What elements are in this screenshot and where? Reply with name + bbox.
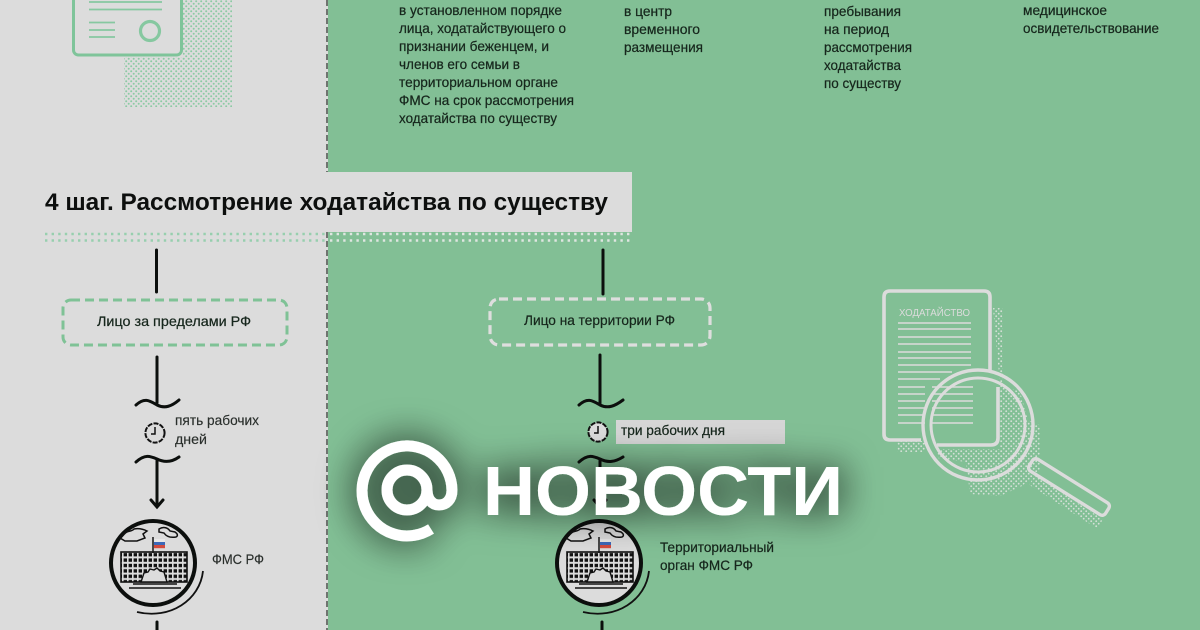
text block: placement in the territorial body: признании беженцем, и [399, 38, 549, 54]
background: green column [328, 0, 1200, 630]
text block: stay during review: пребывания [824, 3, 901, 19]
handle [1027, 457, 1111, 517]
text block: placement in the territorial body: лица, ходатайствующего о [399, 20, 566, 36]
text block: placement in the territorial body [399, 2, 574, 126]
logo wordmark: НОВОСТИ [483, 452, 843, 530]
column divider [326, 0, 328, 630]
label: five working days [175, 412, 259, 447]
arrow with break [579, 456, 623, 507]
heading dotted underline [45, 234, 632, 240]
text block: placement in the territorial body: ходатайства по существу [399, 110, 557, 126]
label: person outside Russia: Лицо за пределами РФ [97, 313, 251, 329]
connector line [155, 250, 158, 292]
text block: placement in the territorial body: членов его семьи в [399, 56, 520, 72]
label: territorial FMS body: орган ФМС РФ [660, 557, 753, 573]
icon: FMS building [111, 521, 203, 614]
text block: placement in the territorial body: в установленном порядке [399, 2, 562, 18]
lens [923, 370, 1033, 480]
logo: @ Novosti [362, 446, 843, 536]
icon: petition under magnifying glass [884, 291, 1111, 524]
icon: clock [588, 422, 608, 442]
label: five working days: дней [175, 431, 207, 447]
text block: medical examination: медицинское [1023, 2, 1107, 18]
connector line [600, 622, 604, 630]
document title: ХОДАТАЙСТВО [899, 306, 970, 319]
icon: certificate [74, 0, 232, 107]
flow: person on Russian territory [490, 250, 785, 630]
label: person on Russian territory: Лицо на территории РФ [524, 312, 675, 328]
dashed box: person outside Russia [63, 300, 287, 345]
connector line [602, 250, 604, 294]
text block: stay during review: на период [824, 21, 889, 37]
enlarged document corner [937, 387, 998, 445]
highlighted label: three working days: три рабочих дня [621, 422, 725, 438]
icon: territorial FMS building [557, 521, 649, 614]
dashed box: person on Russian territory [490, 299, 710, 345]
text block: stay during review: ходатайства [824, 57, 901, 73]
icon: clock [145, 423, 165, 443]
highlighted label: three working days [616, 420, 785, 444]
text block: medical examination: освидетельствование [1023, 20, 1159, 36]
dotted shadow [897, 308, 1040, 496]
connector with break [579, 355, 623, 407]
document lines [898, 323, 973, 423]
text block: temporary accommodation centre: временного [624, 21, 700, 37]
text block: placement in the territorial body: ФМС на срок рассмотрения [399, 92, 574, 108]
flow: person outside Russia [63, 250, 287, 630]
label: territorial FMS body [660, 539, 774, 573]
text block: stay during review [824, 3, 912, 91]
logo mark [362, 446, 452, 536]
label: territorial FMS body: Территориальный [660, 539, 774, 555]
label: five working days: пять рабочих [175, 412, 259, 428]
connector line [156, 622, 158, 630]
text block: placement in the territorial body: территориальном органе [399, 74, 558, 90]
text block: temporary accommodation centre: в центр [624, 3, 672, 19]
connector with break [136, 357, 179, 407]
heading: step 4: 4 шаг. Рассмотрение ходатайства по существу [45, 189, 608, 216]
text block: medical examination [1023, 2, 1159, 36]
text block: temporary accommodation centre: размещения [624, 39, 703, 55]
document [884, 291, 990, 440]
text block: temporary accommodation centre [624, 3, 703, 55]
text block: stay during review: по существу [824, 75, 901, 91]
arrow with break [136, 456, 179, 507]
text block: stay during review: рассмотрения [824, 39, 912, 55]
label: FMS of Russia: ФМС РФ [212, 551, 264, 567]
